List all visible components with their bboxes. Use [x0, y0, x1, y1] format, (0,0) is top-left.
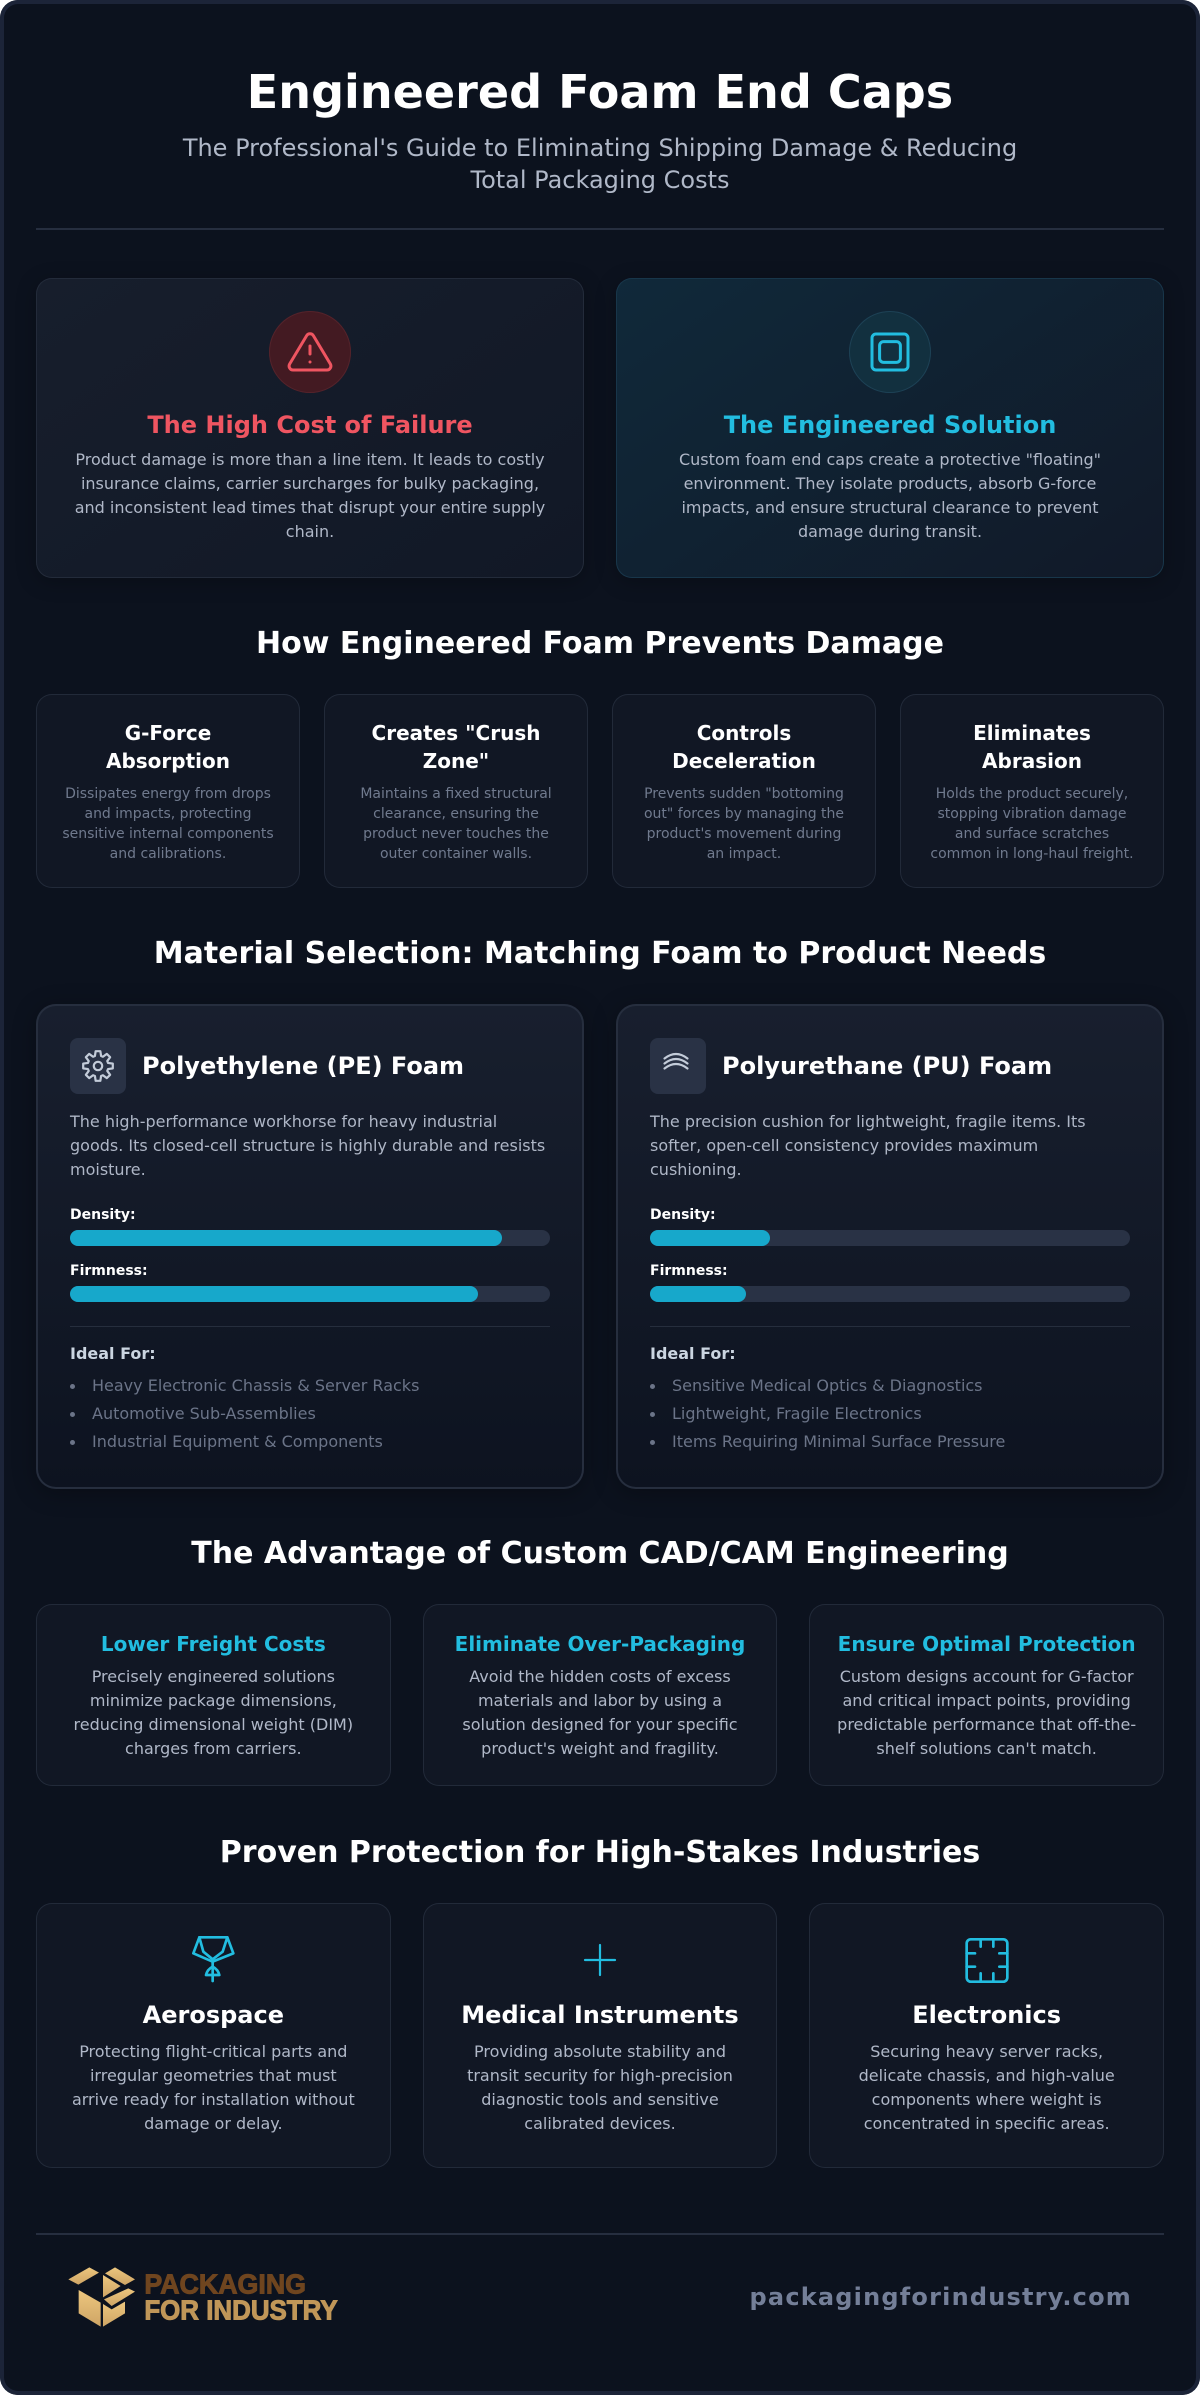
ideal for heading: Ideal For: — [70, 1344, 156, 1363]
description: softer, open-cell consistency provides maximum — [650, 1136, 1038, 1155]
list item: Industrial Equipment & Components — [92, 1432, 383, 1451]
description: The high-performance workhorse for heavy industrial — [70, 1112, 497, 1131]
list item: Lightweight, Fragile Electronics — [672, 1404, 922, 1423]
card text: an impact. — [707, 846, 781, 862]
card text: arrive ready for installation without — [72, 2090, 355, 2109]
card text — [859, 2042, 1115, 2133]
card title: Medical Instruments — [461, 2001, 739, 2029]
card: crush zone — [324, 694, 588, 888]
card title: Creates "Crush — [372, 721, 540, 745]
card text: Securing heavy server racks, — [870, 2042, 1103, 2061]
header — [182, 65, 1017, 194]
icon: aerospace — [192, 1936, 235, 1982]
subtitle — [182, 134, 1017, 194]
card text: product's movement during — [647, 826, 841, 842]
card: eliminate over-packaging — [423, 1604, 777, 1786]
card text — [62, 786, 274, 862]
text: insurance claims, carrier surcharges for bulky packaging, — [81, 474, 539, 493]
list item: Automotive Sub-Assemblies — [92, 1404, 316, 1423]
wordmark: PACKAGING — [144, 2268, 306, 2299]
card text: damage or delay. — [144, 2114, 283, 2133]
list item: Sensitive Medical Optics & Diagnostics — [672, 1376, 983, 1395]
icon: plus — [584, 1944, 616, 1976]
wordmark — [144, 2268, 338, 2325]
material name: Polyethylene (PE) Foam — [142, 1052, 464, 1080]
card title: Deceleration — [672, 749, 816, 773]
website url: packagingforindustry.com — [750, 2283, 1132, 2311]
heading: industries: Proven Protection for High-Stakes Industries — [220, 1835, 980, 1870]
panel: polyurethane foam — [616, 1004, 1164, 1489]
card text — [74, 1667, 353, 1758]
card: medical instruments — [423, 1903, 777, 2168]
card text: diagnostic tools and sensitive — [481, 2090, 719, 2109]
card text: Precisely engineered solutions — [92, 1667, 335, 1686]
text: Custom foam end caps create a protective "floating" — [679, 450, 1101, 469]
card title — [372, 721, 540, 773]
density bar 25% — [650, 1230, 1130, 1246]
card text: Avoid the hidden costs of excess — [469, 1667, 731, 1686]
card text: clearance, ensuring the — [373, 806, 539, 822]
card text: common in long-haul freight. — [930, 846, 1134, 862]
card title: Zone" — [423, 749, 489, 773]
text: and inconsistent lead times that disrupt your entire supply — [75, 498, 545, 517]
logo: packaging for industry — [68, 2267, 338, 2327]
ideal for heading: Ideal For: — [650, 1344, 736, 1363]
card text: predictable performance that off-the- — [837, 1715, 1136, 1734]
card text: and impacts, protecting — [84, 806, 252, 822]
card text: Dissipates energy from drops — [65, 786, 271, 802]
card text: Maintains a fixed structural — [360, 786, 552, 802]
card text: materials and labor by using a — [478, 1691, 722, 1710]
description — [70, 1112, 545, 1179]
icon: waves — [650, 1038, 706, 1094]
card title: Eliminate Over-Packaging — [455, 1632, 745, 1656]
heading: material selection: Material Selection: Matching Foam to Product Needs — [154, 936, 1046, 971]
card text: components where weight is — [872, 2090, 1102, 2109]
card: g-force absorption — [36, 694, 300, 888]
card title — [973, 721, 1091, 773]
text: Product damage is more than a line item. It leads to costly — [75, 450, 545, 469]
heading: how engineered foam prevents damage: How Engineered Foam Prevents Damage — [256, 626, 944, 661]
card text: sensitive internal components — [62, 826, 274, 842]
card text: delicate chassis, and high-value — [859, 2066, 1115, 2085]
icon: warning triangle — [269, 311, 351, 393]
description: goods. Its closed-cell structure is highly durable and resists — [70, 1136, 545, 1155]
card title: Abrasion — [982, 749, 1082, 773]
card title: Eliminates — [973, 721, 1091, 745]
card title — [106, 721, 230, 773]
card text: Holds the product securely, — [936, 786, 1128, 802]
text: impacts, and ensure structural clearance to prevent — [681, 498, 1099, 517]
card text: reducing dimensional weight (DIM) — [74, 1715, 353, 1734]
card text — [930, 786, 1134, 862]
title: Engineered Foam End Caps — [247, 65, 953, 119]
wordmark: FOR INDUSTRY — [144, 2294, 338, 2325]
firmness bar 85% — [70, 1286, 550, 1302]
card title — [672, 721, 816, 773]
card: aerospace — [36, 1903, 391, 2168]
card title: Electronics — [912, 2001, 1061, 2029]
card title: Lower Freight Costs — [101, 1632, 326, 1656]
list item: Heavy Electronic Chassis & Server Racks — [92, 1376, 419, 1395]
text: damage during transit. — [798, 522, 982, 541]
card: eliminates abrasion — [900, 694, 1164, 888]
card text: concentrated in specific areas. — [864, 2114, 1110, 2133]
card text: outer container walls. — [380, 846, 532, 862]
card text — [644, 786, 844, 862]
card text: calibrated devices. — [524, 2114, 676, 2133]
card text: Custom designs account for G-factor — [840, 1667, 1134, 1686]
heading: cad/cam advantage: The Advantage of Custom CAD/CAM Engineering — [191, 1536, 1009, 1571]
card text: out" forces by managing the — [644, 806, 844, 822]
card text: and critical impact points, providing — [842, 1691, 1131, 1710]
list item: Items Requiring Minimal Surface Pressure — [672, 1432, 1005, 1451]
density bar 90% — [70, 1230, 550, 1246]
card title: G-Force — [125, 721, 211, 745]
card text: and surface scratches — [955, 826, 1109, 842]
icon: open box — [68, 2267, 135, 2327]
card text: product's weight and fragility. — [481, 1739, 719, 1758]
text: environment. They isolate products, absorb G-force — [684, 474, 1096, 493]
subtitle: The Professional's Guide to Eliminating Shipping Damage & Reducing — [183, 134, 1017, 162]
card: ensure optimal protection — [809, 1604, 1164, 1786]
card text: minimize package dimensions, — [90, 1691, 337, 1710]
card text: charges from carriers. — [125, 1739, 302, 1758]
heading: The High Cost of Failure — [147, 411, 473, 439]
panel: the high cost of failure — [36, 278, 584, 578]
card text: transit security for high-precision — [467, 2066, 733, 2085]
card title: Controls — [697, 721, 791, 745]
card text: solution designed for your specific — [462, 1715, 738, 1734]
card text: product never touches the — [363, 826, 549, 842]
description — [650, 1112, 1086, 1179]
subtitle: Total Packaging Costs — [470, 166, 730, 194]
text — [679, 450, 1101, 541]
card text — [72, 2042, 355, 2133]
card text: shelf solutions can't match. — [876, 1739, 1097, 1758]
card text — [837, 1667, 1136, 1758]
firmness label: Firmness: — [70, 1263, 148, 1279]
card text: Protecting flight-critical parts and — [79, 2042, 347, 2061]
icon: nested square — [849, 311, 931, 393]
card text — [462, 1667, 738, 1758]
card text — [360, 786, 552, 862]
card text: Prevents sudden "bottoming — [644, 786, 844, 802]
icon: chip — [965, 1938, 1009, 1983]
card title: Aerospace — [143, 2001, 284, 2029]
text — [75, 450, 545, 541]
card text: stopping vibration damage — [937, 806, 1127, 822]
card: controls deceleration — [612, 694, 876, 888]
density label: Density: — [650, 1207, 716, 1223]
description: The precision cushion for lightweight, fragile items. Its — [650, 1112, 1086, 1131]
icon: gear — [70, 1038, 126, 1094]
density label: Density: — [70, 1207, 136, 1223]
text: chain. — [286, 522, 334, 541]
firmness label: Firmness: — [650, 1263, 728, 1279]
card text: and calibrations. — [110, 846, 226, 862]
panel: polyethylene foam — [36, 1004, 584, 1489]
card text: irregular geometries that must — [90, 2066, 337, 2085]
card: electronics — [809, 1903, 1164, 2168]
firmness bar 20% — [650, 1286, 1130, 1302]
description: moisture. — [70, 1160, 146, 1179]
card text: Providing absolute stability and — [474, 2042, 726, 2061]
heading: The Engineered Solution — [724, 411, 1056, 439]
material name: Polyurethane (PU) Foam — [722, 1052, 1052, 1080]
card text — [467, 2042, 733, 2133]
panel: the engineered solution — [616, 278, 1164, 578]
card title: Ensure Optimal Protection — [838, 1632, 1136, 1656]
card: lower freight costs — [36, 1604, 391, 1786]
card title: Absorption — [106, 749, 230, 773]
description: cushioning. — [650, 1160, 742, 1179]
